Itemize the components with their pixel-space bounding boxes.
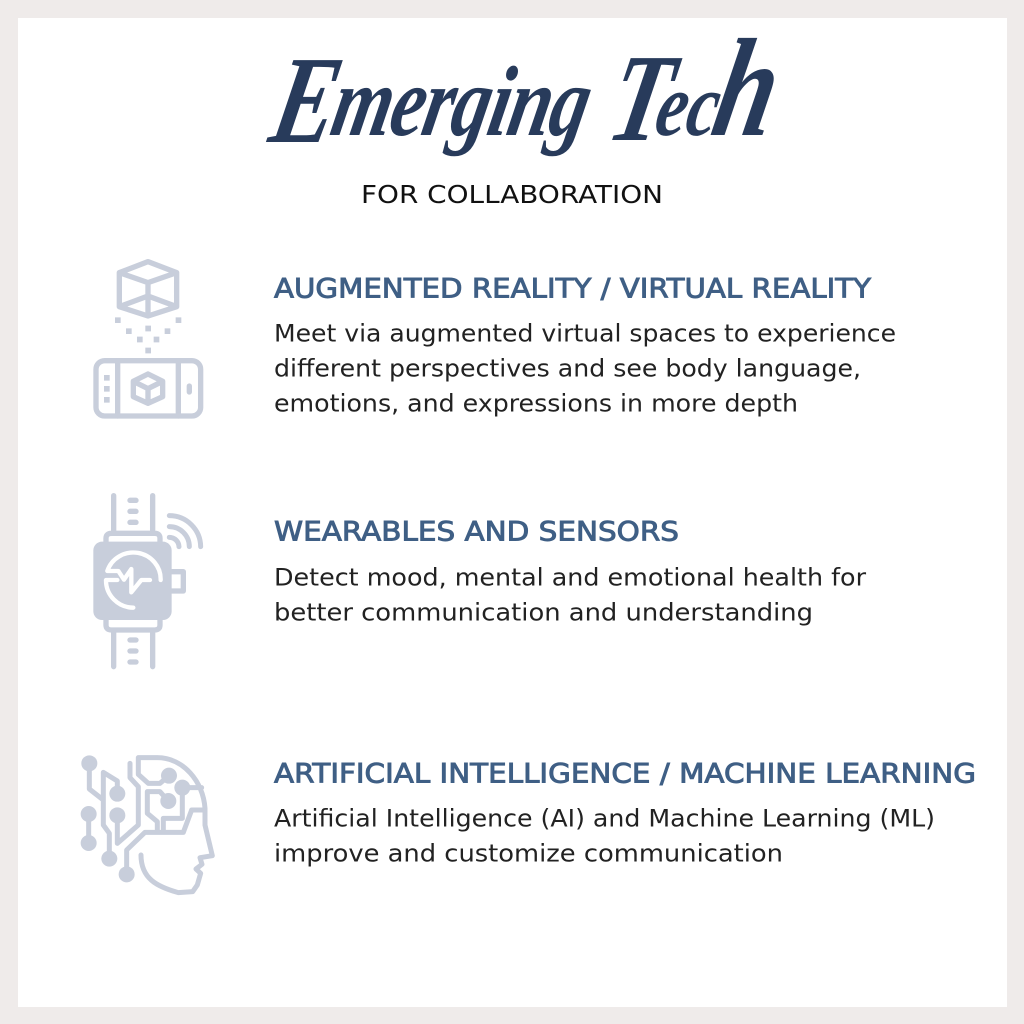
text block: AI / ML description: improve and customize communication bbox=[274, 840, 783, 868]
icon: AR cube and phone bbox=[96, 262, 201, 416]
icon: smartwatch with sensor signal bbox=[93, 496, 201, 667]
text block: AR / VR description: emotions, and expressions in more depth bbox=[274, 390, 798, 418]
title: T bbox=[599, 29, 689, 168]
section: artificial intelligence and machine learning bbox=[274, 758, 976, 868]
title: E bbox=[260, 31, 353, 170]
text block: wearables description: better communication and understanding bbox=[274, 598, 813, 626]
title: ec bbox=[648, 55, 730, 155]
text block: AR / VR description: Meet via augmented virtual spaces to experience bbox=[274, 320, 896, 348]
heading: AR / VR: AUGMENTED REALITY / VIRTUAL REALITY bbox=[274, 274, 872, 304]
title: h bbox=[702, 11, 793, 166]
heading: wearables: WEARABLES AND SENSORS bbox=[274, 516, 679, 548]
text block: AI / ML description bbox=[274, 804, 935, 868]
text block: AI / ML description: Artificial Intelligence (AI) and Machine Learning (ML) bbox=[274, 804, 935, 832]
section: augmented and virtual reality bbox=[274, 274, 896, 418]
subtitle: FOR COLLABORATION bbox=[361, 180, 663, 209]
title: merging bbox=[324, 45, 600, 157]
text block: wearables description bbox=[274, 564, 866, 626]
heading: AI / ML: ARTIFICIAL INTELLIGENCE / MACHINE LEARNING bbox=[274, 758, 976, 790]
text block: wearables description: Detect mood, mental and emotional health for bbox=[274, 564, 866, 592]
section: wearables and sensors bbox=[274, 516, 866, 626]
text block: AR / VR description: different perspectives and see body language, bbox=[274, 354, 861, 382]
icon: AI head with circuits bbox=[81, 755, 212, 893]
text block: AR / VR description bbox=[274, 320, 896, 418]
